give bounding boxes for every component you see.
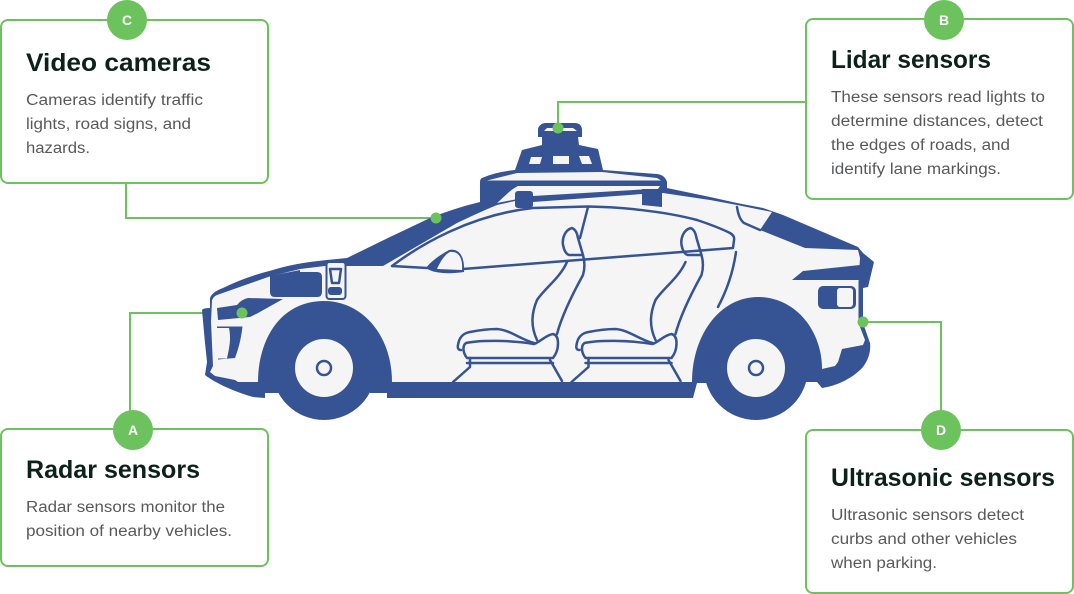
rear hub centre bbox=[749, 361, 763, 375]
badge A bbox=[113, 410, 153, 450]
roof sensor box rear bbox=[642, 189, 662, 207]
spoiler bbox=[792, 265, 864, 280]
panel: ultrasonic sensors bbox=[806, 410, 1073, 593]
front hub centre bbox=[317, 361, 331, 375]
description: determine distances, detect bbox=[831, 113, 1044, 130]
roof pod upper strip bbox=[487, 172, 661, 180]
description: identify lane markings. bbox=[831, 161, 1001, 178]
panel: lidar sensors bbox=[806, 0, 1073, 199]
badge D bbox=[921, 410, 961, 450]
front tire bbox=[272, 316, 376, 420]
sensor dot: ultrasonic bbox=[858, 316, 868, 328]
sill bbox=[370, 382, 707, 398]
lidar slit bbox=[544, 128, 577, 131]
side mirror bbox=[426, 250, 464, 273]
lidar housing windows bbox=[529, 156, 592, 164]
description: Cameras identify traffic bbox=[26, 92, 203, 109]
front grille bbox=[217, 326, 242, 360]
fender sensor box bbox=[326, 262, 346, 299]
description: the edges of roads, and bbox=[831, 137, 1010, 154]
car body panels bbox=[210, 193, 865, 382]
front seat bbox=[453, 228, 584, 382]
window outline bbox=[392, 206, 734, 269]
headlamp bbox=[217, 298, 283, 320]
car body silhouette bbox=[202, 123, 874, 398]
badge C: C bbox=[122, 12, 132, 28]
description bbox=[831, 89, 1045, 178]
rear lamp bbox=[818, 286, 856, 309]
connector: lidar sensors bbox=[558, 102, 806, 128]
illustration: car cutaway side view bbox=[202, 123, 874, 420]
hood panel bbox=[270, 270, 322, 297]
description bbox=[26, 499, 232, 540]
sensor dot: video camera bbox=[430, 212, 442, 224]
description bbox=[26, 92, 203, 157]
badge B: B bbox=[939, 12, 949, 28]
badge B bbox=[924, 0, 964, 40]
badge D: D bbox=[936, 422, 946, 438]
description: when parking. bbox=[830, 555, 937, 572]
description: These sensors read lights to bbox=[831, 89, 1045, 106]
sensor dot: radar bbox=[236, 308, 248, 318]
badge C bbox=[107, 0, 147, 40]
rear seat bbox=[572, 228, 703, 382]
roof sensor box front bbox=[515, 191, 533, 208]
door pillar bbox=[580, 207, 588, 238]
description: lights, road signs, and bbox=[26, 116, 191, 133]
heading: Video cameras bbox=[26, 49, 211, 77]
heading: Radar sensors bbox=[26, 456, 200, 484]
description: Ultrasonic sensors detect bbox=[831, 507, 1025, 524]
panel: radar sensors bbox=[1, 410, 268, 566]
connector: ultrasonic sensors bbox=[863, 322, 941, 430]
heading: Lidar sensors bbox=[831, 46, 991, 74]
sensor dot: lidar bbox=[552, 122, 564, 134]
rear hub bbox=[727, 339, 785, 397]
panel: video cameras bbox=[1, 0, 268, 183]
badge A: A bbox=[128, 422, 138, 438]
description: hazards. bbox=[26, 140, 90, 157]
rear door edge bbox=[718, 252, 736, 307]
connector: radar sensors bbox=[130, 313, 242, 429]
rear quarter glass outline bbox=[737, 207, 760, 230]
front hub bbox=[295, 339, 353, 397]
rear tire bbox=[704, 316, 808, 420]
description: Radar sensors monitor the bbox=[26, 499, 225, 516]
description bbox=[830, 507, 1025, 572]
connector: video cameras bbox=[126, 183, 436, 218]
front wheel arch bbox=[258, 301, 392, 382]
description: position of nearby vehicles. bbox=[26, 523, 232, 540]
roof pod lower strip bbox=[497, 186, 660, 203]
heading: Ultrasonic sensors bbox=[831, 464, 1055, 492]
rear wheel arch bbox=[692, 297, 822, 382]
description: curbs and other vehicles bbox=[831, 531, 1017, 548]
